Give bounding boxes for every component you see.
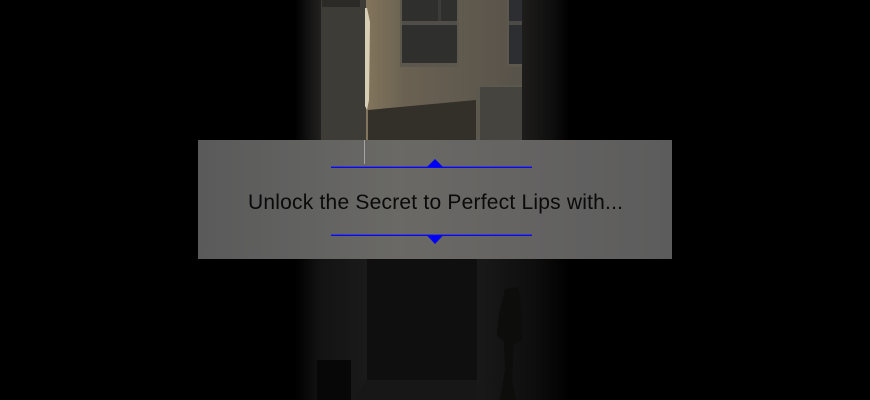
lower left side: [295, 259, 367, 400]
pillar cap: [322, 0, 360, 7]
left vignette column: [295, 0, 321, 140]
title text: Unlock the Secret to Perfect Lips with...: [248, 191, 623, 214]
bin: [317, 360, 351, 400]
grey box structure: [477, 85, 522, 140]
right vignette column: [522, 0, 570, 140]
bottom divider: [331, 235, 532, 244]
main window: [400, 0, 459, 67]
shadowed lower wall: [368, 100, 476, 140]
lower step: [352, 380, 482, 400]
right window: [507, 0, 522, 67]
bright light strip: [365, 8, 370, 110]
left pillar: [321, 0, 366, 140]
building photo: [295, 0, 570, 400]
light streak: [364, 140, 365, 164]
top divider: [331, 159, 532, 168]
panel background: [198, 140, 672, 259]
lower door: [367, 259, 477, 400]
lower right side: [477, 259, 570, 400]
sunlit wall: [366, 0, 522, 140]
plant: [497, 287, 522, 400]
title panel: [198, 140, 672, 259]
